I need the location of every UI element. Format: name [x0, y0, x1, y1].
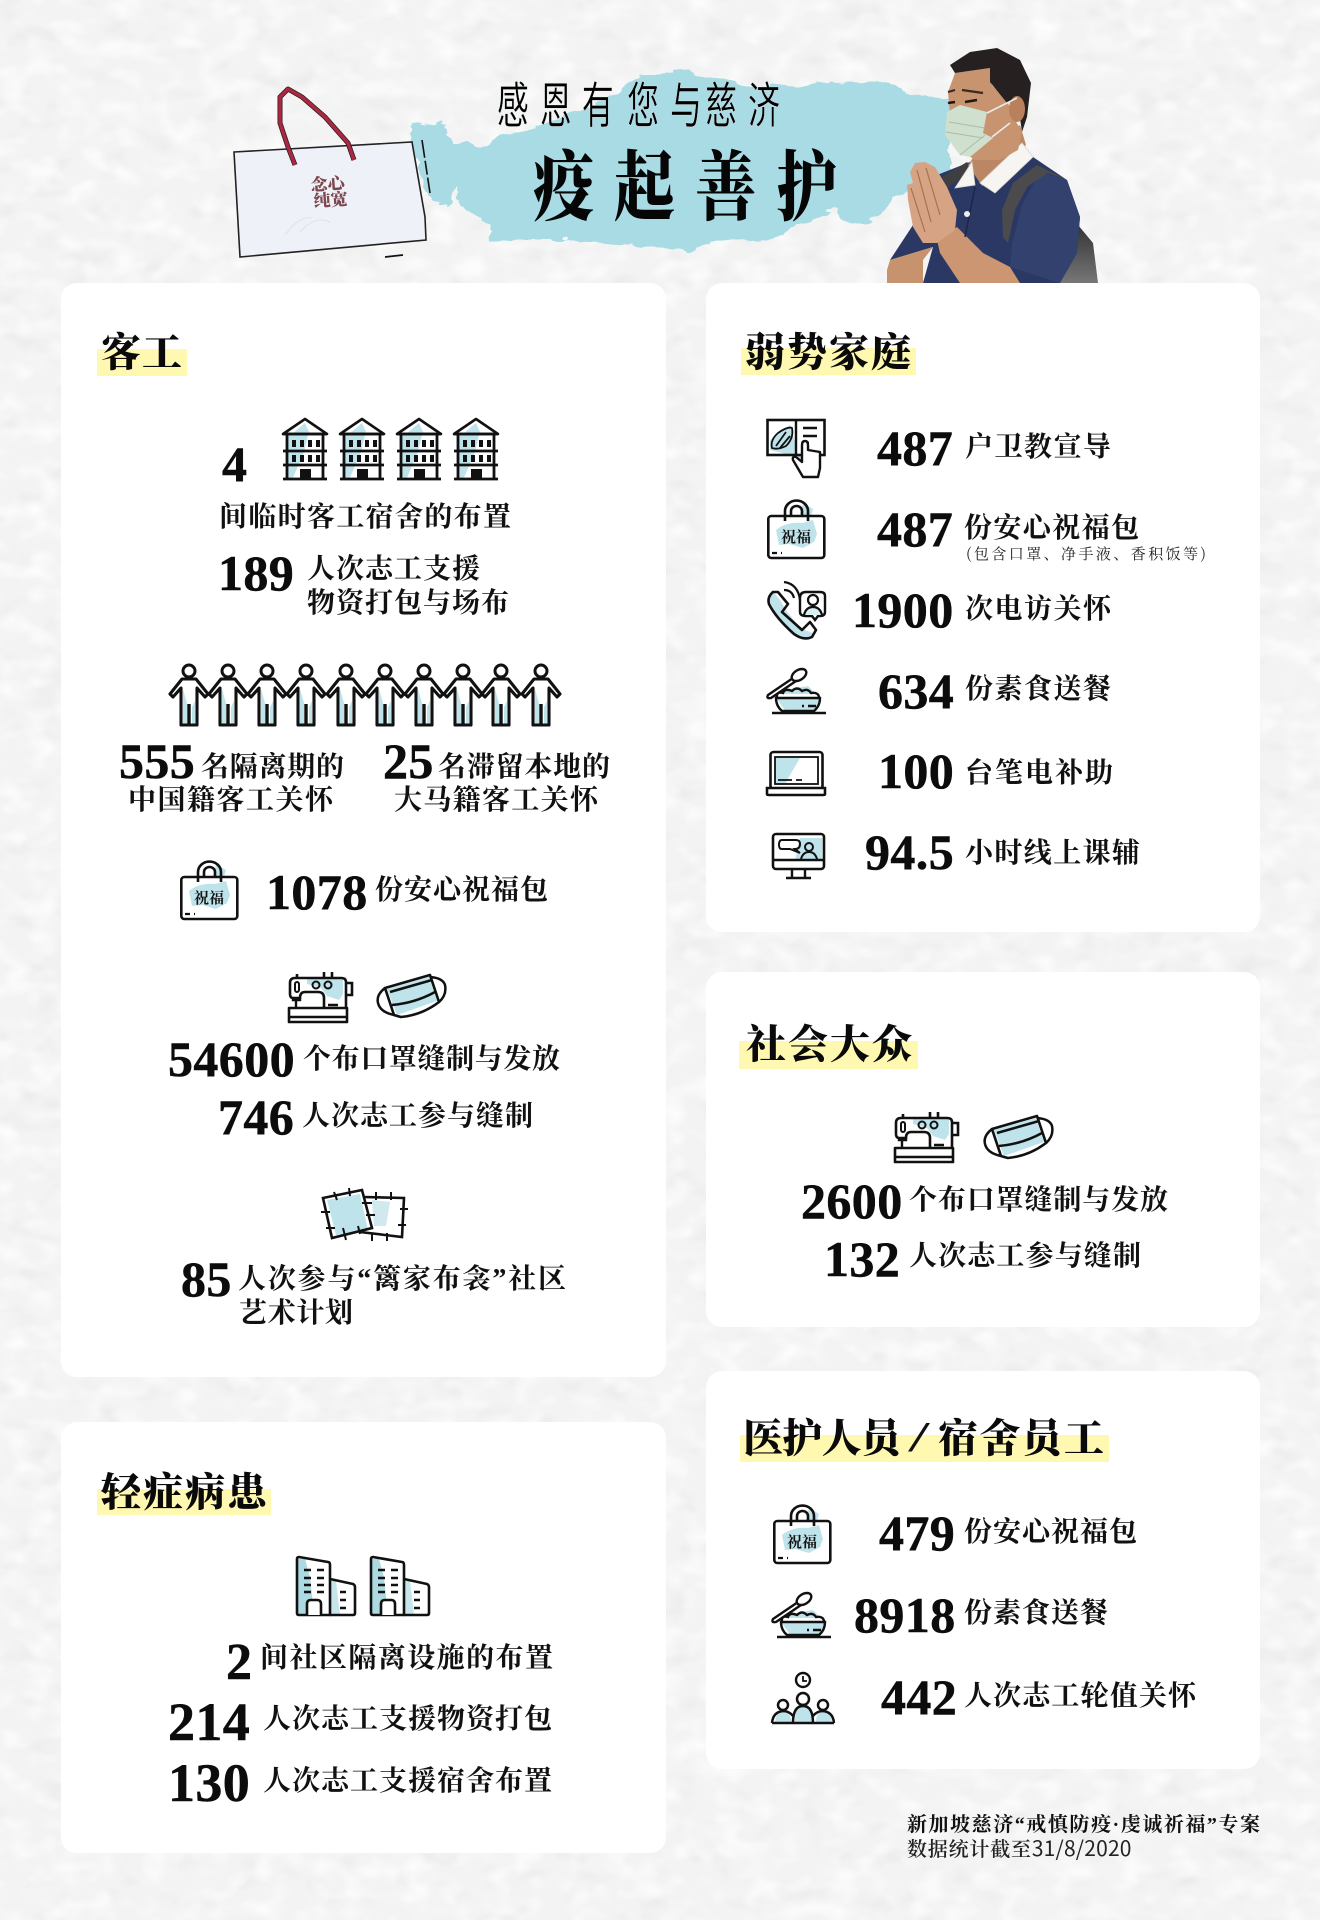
row: 8918 vegetarian meals: 8918 [854, 1587, 956, 1643]
footer: source note [907, 1812, 1260, 1863]
row: 8918 vegetarian meals [772, 1587, 1108, 1643]
row: 1900 phone calls [768, 582, 1113, 638]
icon: blessing bag: 祝福 [194, 889, 224, 907]
mask [945, 105, 993, 157]
heading: 医护人员/宿舍员工 [740, 1414, 1109, 1462]
heading: 轻症病患: 轻症病患 [100, 1470, 270, 1515]
heading: 医护人员/宿舍员工: / [908, 1414, 931, 1460]
stat: 746 volunteers: 746 [218, 1089, 294, 1145]
icon: blessing bag [768, 501, 824, 558]
icon: monitor with online lesson [773, 834, 824, 878]
stat: 54600 masks: 个布口罩缝制与发放 [303, 1043, 560, 1075]
row: 94.5 tutoring hours: 94.5 [865, 824, 954, 880]
icon: spoon and rice bowl [767, 667, 826, 713]
stat: 214 volunteers: 人次志工支援物资打包 [263, 1703, 552, 1735]
stat: 85 art project [181, 1251, 566, 1329]
row: 487 health education [768, 420, 1111, 478]
row: 94.5 tutoring hours: 小时线上课辅 [965, 837, 1140, 869]
stat: 189 volunteers [218, 545, 509, 619]
icon: two community buildings [297, 1557, 429, 1615]
stat: 1078 care packs [181, 862, 548, 920]
icon: four dormitory buildings [283, 419, 498, 480]
icon: spoon and rice bowl [772, 1591, 831, 1637]
row: 442 volunteers [772, 1669, 1198, 1725]
icon: sewing machine and mask [895, 1112, 1052, 1162]
backpack [1060, 225, 1098, 283]
row: 442 volunteers: 442 [881, 1669, 957, 1725]
shirt [890, 157, 1080, 283]
stat: 2 isolation facilities: 间社区隔离设施的布置 [260, 1641, 553, 1674]
heading: 医护人员/宿舍员工: 宿舍员工 [938, 1416, 1104, 1461]
tote bag photo: 纯宽 [313, 185, 348, 212]
row: 1900 phone calls: 1900 [852, 582, 954, 638]
button and placket [965, 187, 975, 237]
face [948, 68, 1022, 160]
stat: 1078 care packs: 1078 [266, 864, 368, 920]
row: 487 care packs: 份安心祝福包 [964, 512, 1139, 544]
stat: 132 volunteers [824, 1231, 1141, 1287]
stat: 54600 masks: 54600 [168, 1031, 295, 1087]
stat: 2600 masks: 个布口罩缝制与发放 [909, 1184, 1168, 1216]
row: 479 care packs: 份安心祝福包 [964, 1516, 1137, 1548]
stat: 85 art project: 85 [181, 1251, 232, 1307]
row: 479 care packs: 479 [879, 1505, 955, 1561]
backpack straps [1002, 165, 1067, 243]
photo: volunteer praying [887, 48, 1098, 283]
icon: stitched fabric patches [321, 1188, 408, 1241]
row: 487 care packs [768, 501, 1206, 564]
row: 487 health education: 户卫教宣导 [965, 431, 1111, 463]
icon: people and clock [772, 1673, 834, 1723]
stat: 746 volunteers [218, 1089, 533, 1145]
row: 94.5 tutoring hours [773, 824, 1140, 880]
row: 100 laptops: 台笔电补助 [965, 757, 1113, 789]
praying hands [907, 162, 957, 243]
icon: blessing bag: 祝福 [781, 528, 811, 546]
row: 487 care packs: (包含口罩、净手液、香积饭等) [966, 543, 1206, 564]
icon: booklet and hand [768, 420, 824, 478]
row: 8918 vegetarian meals: 份素食送餐 [964, 1597, 1108, 1629]
row: 487 health education: 487 [877, 420, 953, 476]
icon: blessing bag [774, 1506, 830, 1563]
panel: 客工 [61, 283, 666, 1377]
stat: 25 Malaysian workers [383, 733, 610, 816]
icon: sewing machine and mask [289, 972, 445, 1022]
stat: 4 dormitories: 间临时客工宿舍的布置 [219, 501, 511, 533]
stat: 4 dormitories: 4 [222, 436, 247, 492]
stat: 130 volunteers: 人次志工支援宿舍布置 [263, 1765, 552, 1797]
stat: 1078 care packs: 份安心祝福包 [375, 874, 548, 906]
heading: 弱势家庭: 弱势家庭 [745, 330, 911, 375]
row: 634 vegetarian meals: 份素食送餐 [965, 673, 1111, 705]
row: 100 laptops: 100 [878, 743, 954, 799]
stat: 555 Chinese workers [119, 733, 344, 816]
heading: 社会大众: 社会大众 [746, 1022, 912, 1067]
row: 634 vegetarian meals [767, 663, 1111, 719]
eyes [948, 90, 983, 93]
heading: 医护人员/宿舍员工: 医护人员 [743, 1416, 905, 1461]
ear [1009, 96, 1025, 122]
stat: 189 volunteers: 人次志工支援 [307, 553, 480, 585]
stat: 2 isolation facilities: 2 [226, 1634, 252, 1691]
banner title: 疫起善护 [533, 127, 858, 236]
stat: 2 isolation facilities [226, 1634, 553, 1691]
stat: 25 Malaysian workers: 大马籍客工关怀 [394, 784, 600, 816]
stat: 555 Chinese workers: 555 [119, 733, 195, 789]
footer: source note: 新加坡慈济“戒慎防疫·虔诚祈福”专案 [907, 1812, 1260, 1836]
stat: 555 Chinese workers: 中国籍客工关怀 [128, 784, 335, 816]
stat: 2600 masks [801, 1173, 1168, 1229]
stat: 189 volunteers: 189 [218, 545, 294, 601]
stat: 555 Chinese workers: 名隔离期的 [201, 750, 344, 783]
panel: 弱势家庭 [706, 283, 1260, 932]
row: 442 volunteers: 人次志工轮值关怀 [964, 1680, 1198, 1712]
panel: 社会大众 [706, 972, 1260, 1327]
icon: row of people holding hands [170, 665, 560, 725]
panel: 轻症病患 [61, 1422, 666, 1853]
stat: 2600 masks: 2600 [801, 1173, 903, 1229]
banner header [234, 48, 1098, 283]
row: 479 care packs [774, 1505, 1137, 1563]
neck [968, 125, 1026, 186]
tote bag photo [234, 89, 430, 257]
row: 487 care packs: 487 [877, 501, 953, 557]
tote bag photo: 念心 [310, 168, 348, 196]
stat: 4 dormitories [219, 419, 511, 533]
stat: 85 art project: 人次参与“篱家布衾”社区 [238, 1263, 566, 1295]
icon: phone and contact bubble [768, 582, 825, 638]
stat: 85 art project: 艺术计划 [239, 1297, 353, 1329]
stat: 130 volunteers [168, 1753, 552, 1813]
footer: source note: 数据统计截至31/8/2020 [907, 1833, 1132, 1863]
row: 634 vegetarian meals: 634 [878, 663, 954, 719]
stat: 25 Malaysian workers: 名滞留本地的 [438, 751, 610, 783]
stat: 132 volunteers: 132 [824, 1231, 900, 1287]
brush wash [410, 73, 950, 250]
icon: laptop [767, 752, 825, 795]
stat: 132 volunteers: 人次志工参与缝制 [909, 1240, 1141, 1272]
hair [950, 48, 1031, 132]
panel: 医护人员/宿舍员工 [706, 1371, 1260, 1769]
icon: blessing bag: 祝福 [787, 1533, 817, 1551]
row: 100 laptops [767, 743, 1113, 799]
stat: 130 volunteers: 130 [168, 1753, 250, 1813]
stat: 189 volunteers: 物资打包与场布 [307, 587, 509, 619]
stat: 746 volunteers: 人次志工参与缝制 [302, 1100, 533, 1132]
arms [887, 247, 933, 283]
stat: 54600 masks [168, 1031, 560, 1087]
stat: 214 volunteers: 214 [168, 1692, 250, 1752]
stat: 214 volunteers [168, 1692, 552, 1752]
heading: 客工: 客工 [101, 330, 182, 375]
banner subtitle: 感恩有您与慈济 [497, 66, 780, 137]
stat: 25 Malaysian workers: 25 [383, 733, 434, 789]
row: 1900 phone calls: 次电访关怀 [965, 593, 1113, 625]
collar [955, 143, 1033, 193]
icon: blessing bag [181, 862, 237, 919]
